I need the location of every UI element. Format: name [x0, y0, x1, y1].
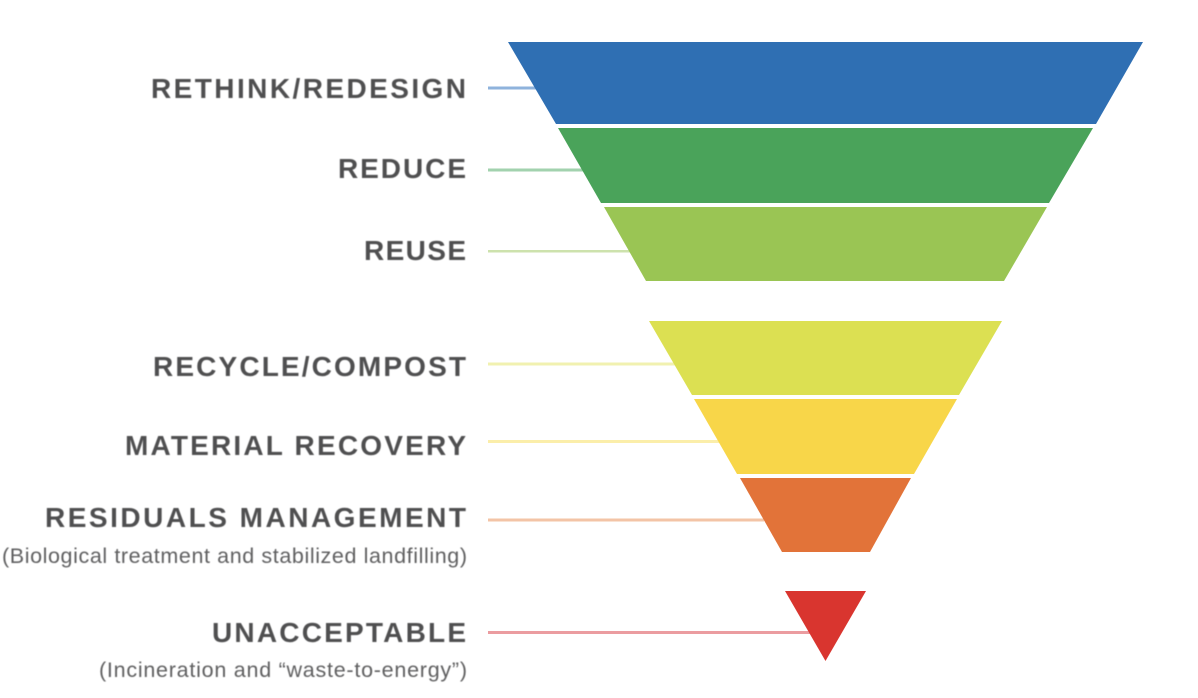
label: reduce: REDUCE — [338, 153, 466, 184]
tier: unacceptable — [99, 591, 866, 682]
label: residuals management: RESIDUALS MANAGEMENT — [45, 502, 466, 533]
sublabel: biological treatment and stabilized landfilling: (Biological treatment and stabilized landfilling) — [2, 544, 467, 568]
funnel band: orange — [740, 478, 911, 552]
funnel band: blue — [508, 42, 1143, 124]
label: reuse: REUSE — [364, 235, 466, 266]
tier: reuse — [364, 207, 1047, 281]
tier: reduce — [338, 128, 1093, 203]
sublabel: incineration and waste-to-energy: (Incineration and “waste-to-energy”) — [99, 658, 467, 682]
funnel band: green — [558, 128, 1093, 203]
funnel tip: red triangle — [785, 591, 866, 661]
connector line: material recovery — [488, 440, 720, 443]
label: unacceptable: UNACCEPTABLE — [212, 617, 466, 648]
tier: recycle/compost — [153, 321, 1002, 395]
tier: material recovery — [125, 399, 957, 474]
label: rethink/redesign: RETHINK/REDESIGN — [151, 73, 466, 104]
funnel band: yellow-green — [649, 321, 1002, 395]
connector line: recycle/compost — [488, 362, 676, 366]
funnel band: yellow — [694, 399, 957, 474]
funnel band: light green — [604, 207, 1047, 281]
connector line: reduce — [488, 168, 584, 172]
connector line: residuals management — [488, 518, 764, 522]
label: material recovery: MATERIAL RECOVERY — [125, 430, 466, 461]
connector line: rethink/redesign — [488, 86, 538, 90]
label: recycle/compost: RECYCLE/COMPOST — [153, 351, 466, 382]
connector line: unacceptable — [488, 631, 810, 634]
tier: rethink/redesign — [151, 42, 1143, 124]
connector line: reuse — [488, 250, 630, 252]
tier: residuals management — [2, 478, 911, 568]
